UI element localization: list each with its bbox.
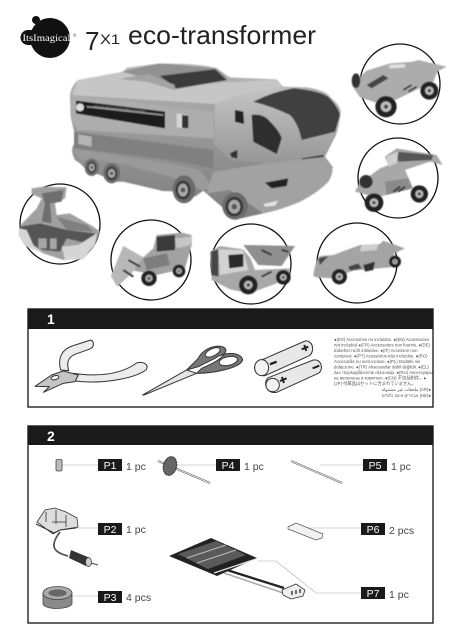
part P4: P4 — [222, 460, 235, 472]
title: eco-transformer — [128, 20, 316, 50]
panel 1: tools required — [28, 308, 433, 407]
text: accessories not included: ●(ES) Accesorios no incluidos. ●(EN) Accessories — [334, 337, 429, 342]
circle: sports car — [352, 44, 447, 124]
panel 1 header: 1 — [47, 311, 55, 327]
part P1 — [56, 459, 146, 473]
panel 1 header — [28, 308, 433, 329]
panel 2: parts list — [28, 426, 433, 623]
text: accessories not included: Zubehör nicht inklusive. ●(IT) Accessori non — [334, 348, 418, 353]
logo: ItsImagical: ItsImagical — [22, 33, 71, 44]
part P3: P3 — [104, 592, 117, 604]
part P5 — [291, 459, 411, 483]
part P6: 2 pcs — [389, 525, 414, 537]
circle: dump truck — [210, 224, 295, 304]
part P1: 1 pc — [126, 461, 146, 473]
part P3: 4 pcs — [126, 592, 151, 604]
text: accessories not included — [334, 337, 433, 398]
title — [85, 20, 316, 56]
part P7: solar panel — [169, 538, 409, 601]
icon: pliers — [35, 340, 147, 392]
circle: race car — [313, 223, 405, 303]
main truck illustration: SOLAR RECHARGEABLE LITHIUM — [93, 104, 146, 114]
text: accessories not included: (JP) 付属品はセットに含まれていません。 — [334, 380, 416, 387]
part P2: P2 — [104, 524, 117, 536]
part P7: solar panel: 1 pc — [389, 589, 409, 601]
part P6: P6 — [367, 524, 380, 536]
part P5: 1 pc — [391, 461, 411, 473]
part P2: 1 pc — [126, 524, 146, 536]
main truck illustration — [70, 63, 341, 220]
logo: ItsImagical: ® — [73, 32, 77, 38]
part P4: 1 pc — [244, 461, 264, 473]
circle: robot — [18, 184, 100, 264]
part P2 — [36, 508, 146, 566]
text: accessories not included: Δεν περιλαμβάνονται αξεσουάρ. ●(RU) Аксессуары — [334, 370, 433, 375]
icon: scissors — [143, 346, 243, 395]
part P6 — [288, 523, 414, 540]
text: accessories not included: not included ●(FR) Accessoires non fournis. ●(DE) — [334, 342, 431, 348]
part P5: P5 — [369, 460, 382, 472]
title: X1 — [100, 31, 120, 47]
part P1: P1 — [104, 460, 117, 472]
text: accessories not included: compresi. ●(PT) Acessórios não incluídos. ●(RO) — [334, 354, 428, 358]
text: accessories not included: אביזרים אינם כלולים (HE)● — [382, 393, 431, 398]
part P7: solar panel: P7 — [367, 588, 380, 600]
text: accessories not included: Accesoriile nu sunt incluse. ●(PL) Dodatki nie — [334, 359, 421, 364]
panel 2 header — [28, 426, 433, 445]
text: accessories not included: не включены в комплект. ●(CN) 不包括附件。● — [334, 374, 427, 382]
logo: ItsImagical — [20, 16, 77, 58]
circle: bulldozer — [111, 220, 192, 300]
icon: batteries — [255, 341, 321, 393]
text: accessories not included: ملحقات غير مشمولة (AR)● — [382, 387, 431, 392]
circle: solar buggy — [355, 138, 443, 218]
text: accessories not included: dołączone. ●(TR) Aksesuarlar dahil değildir. ●(EL) — [334, 364, 430, 370]
part P3 — [43, 586, 151, 608]
panel 2 header: 2 — [47, 428, 55, 444]
title: 7 — [85, 26, 99, 56]
part P4 — [158, 455, 264, 483]
